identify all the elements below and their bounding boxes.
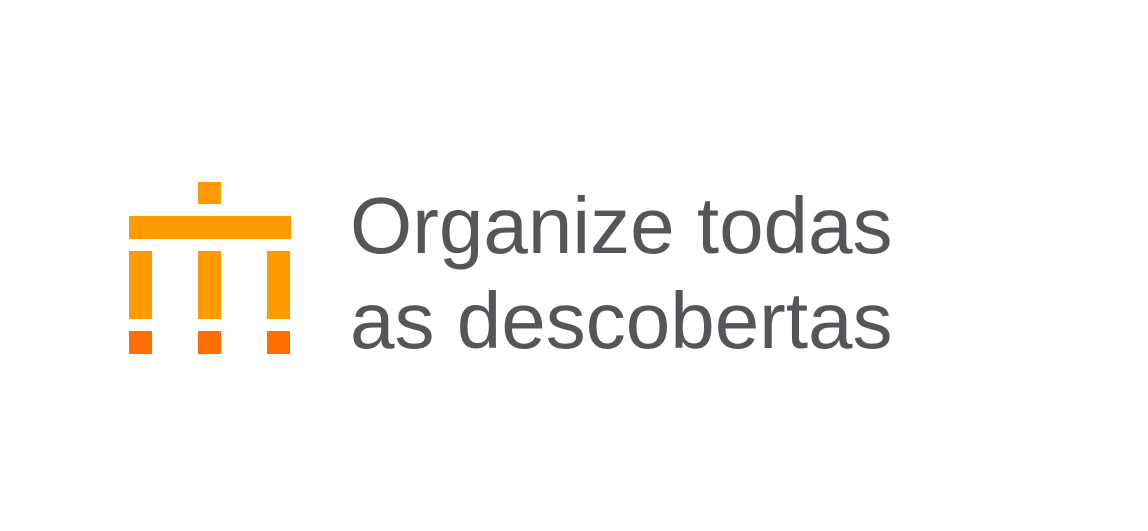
heading text: Organize todas: [350, 181, 893, 270]
heading text: [350, 181, 893, 365]
heading text: as descobertas: [350, 276, 893, 365]
icon: columns logo: [129, 182, 291, 354]
